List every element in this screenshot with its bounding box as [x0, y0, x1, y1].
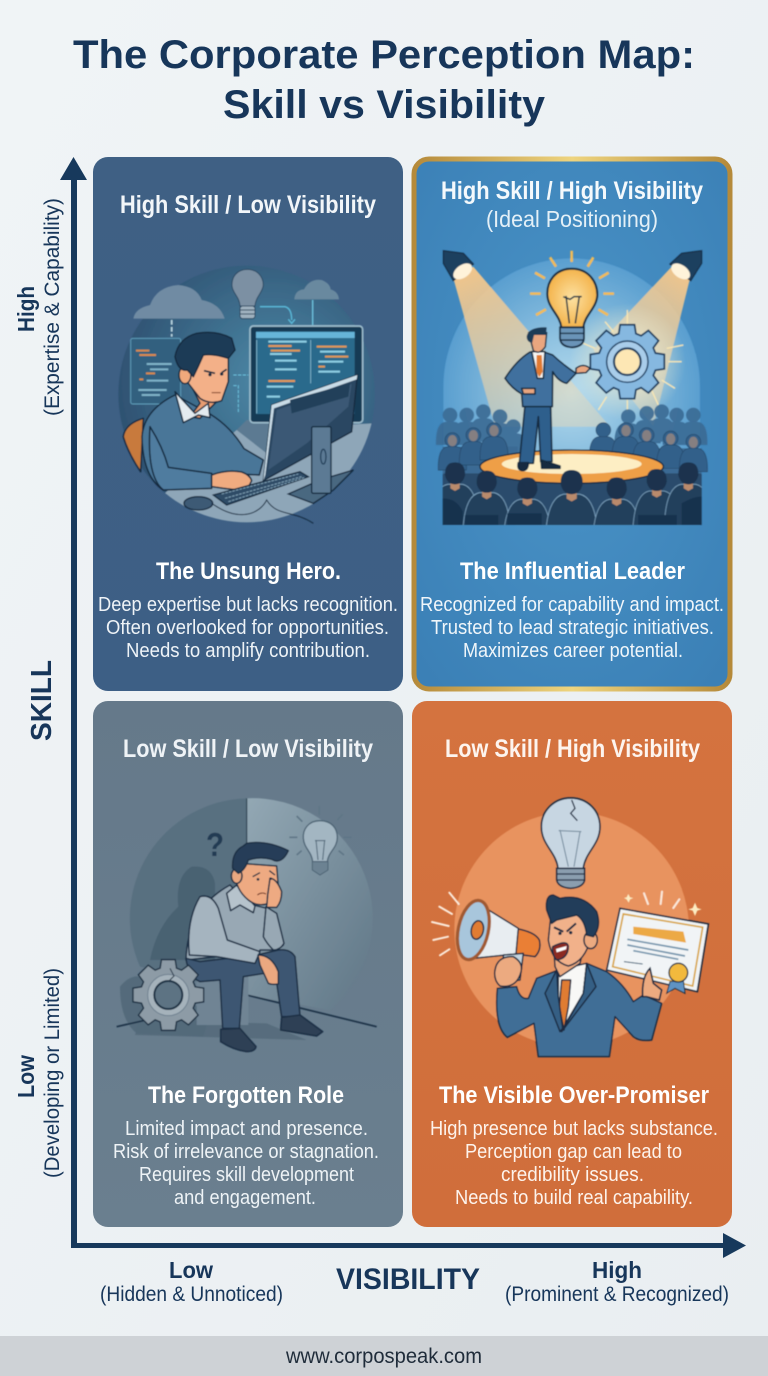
illustration: over-promiser with megaphone — [432, 798, 708, 1057]
illustration: programmer at desk — [118, 266, 387, 530]
high visibility label: High — [592, 1257, 642, 1283]
description: Maximizes career potential. — [463, 640, 683, 662]
heading: High Skill / Low Visibility — [120, 191, 376, 219]
high skill label: High — [13, 286, 39, 332]
description: Needs to amplify contribution. — [126, 640, 370, 662]
description: Deep expertise but lacks recognition. — [98, 594, 398, 616]
panel: low skill low visibility — [93, 701, 403, 1227]
heading: Low Skill / High Visibility — [445, 735, 700, 763]
title: Skill vs Visibility — [223, 83, 546, 127]
description — [113, 1118, 379, 1209]
description: Risk of irrelevance or stagnation. — [113, 1141, 379, 1163]
description — [98, 594, 398, 662]
persona name: The Influential Leader — [460, 558, 685, 585]
description: Perception gap can lead to — [465, 1141, 682, 1163]
skill axis labels — [13, 198, 64, 1178]
persona name: The Unsung Hero. — [156, 558, 341, 585]
description: Limited impact and presence. — [125, 1118, 368, 1140]
website url: www.corpospeak.com — [285, 1345, 482, 1368]
low skill description: (Developing or Limited) — [41, 968, 64, 1178]
persona name: The Visible Over-Promiser — [439, 1082, 709, 1109]
high visibility description: (Prominent & Recognized) — [505, 1283, 729, 1306]
description: Recognized for capability and impact. — [420, 594, 724, 616]
description: Needs to build real capability. — [455, 1187, 693, 1209]
description — [430, 1118, 718, 1209]
description: Often overlooked for opportunities. — [106, 617, 389, 639]
visibility axis arrow — [71, 1233, 746, 1258]
title: The Corporate Perception Map: — [73, 33, 695, 77]
low visibility label: Low — [169, 1257, 213, 1283]
heading: Low Skill / Low Visibility — [123, 735, 373, 763]
high skill description: (Expertise & Capability) — [41, 198, 64, 416]
axis title: VISIBILITY: VISIBILITY — [336, 1263, 480, 1296]
low visibility description: (Hidden & Unnoticed) — [100, 1283, 283, 1306]
persona name: The Forgotten Role — [148, 1082, 344, 1109]
axis title: SKILL: SKILL — [26, 660, 58, 741]
description: Requires skill development — [139, 1164, 354, 1186]
skill axis arrow — [60, 157, 87, 1248]
visibility axis labels — [100, 1257, 729, 1306]
illustration: discouraged employee — [117, 798, 377, 1052]
heading: High Skill / High Visibility — [441, 177, 703, 205]
footer — [0, 1336, 768, 1376]
panel: high skill high visibility — [414, 159, 730, 689]
panel: low skill high visibility — [412, 701, 732, 1227]
description — [420, 594, 724, 662]
illustration: discouraged employee: ? — [206, 827, 224, 864]
description: and engagement. — [174, 1187, 316, 1209]
panel: high skill low visibility — [93, 157, 403, 691]
illustration: leader on stage — [431, 251, 712, 544]
description: credibility issues. — [501, 1164, 644, 1186]
low skill label: Low — [13, 1055, 39, 1098]
description: High presence but lacks substance. — [430, 1118, 718, 1140]
subheading: (Ideal Positioning) — [486, 206, 658, 232]
description: Trusted to lead strategic initiatives. — [431, 617, 714, 639]
title — [73, 33, 695, 127]
